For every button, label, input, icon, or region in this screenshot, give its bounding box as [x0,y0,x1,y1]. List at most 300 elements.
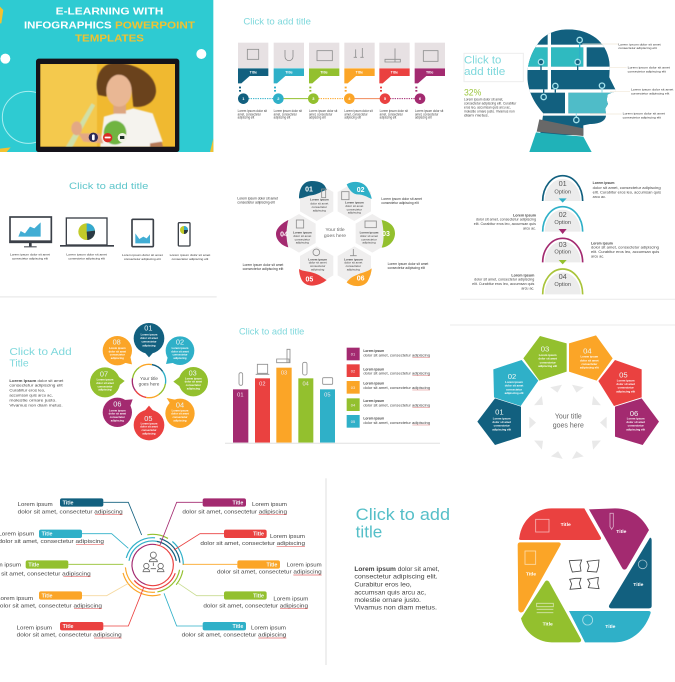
bubble centre title: Your title [140,376,158,381]
title pills: Title [42,532,53,538]
head labels: consectetur adipiscing elit [631,92,670,96]
numbered blobs: 03 [382,231,390,238]
hexagon captions: adipiscing [311,267,325,271]
timeline track: 5 [384,96,387,101]
title pills: Title [42,593,53,599]
numbered blobs [276,181,395,286]
head labels: consectetur adipiscing elit [618,46,657,50]
bubbles: Lorem ipsum [141,421,158,425]
bubbles: 05 [144,414,152,423]
timeline captions: Lorem ipsum dolor sit [274,109,302,113]
option captions left: arcu ac. [523,227,536,231]
panel: stacked options [460,176,675,300]
hexagon captions: dolor sit amet [345,204,363,208]
cover title: POWERPOINT [115,21,196,32]
hexagon captions: Lorem ipsum [345,201,364,205]
bubbles: dolor sit amet [109,412,126,416]
bubble centre title [139,376,160,386]
pentagons: Lorem ipsum [539,353,557,357]
pentagons: Lorem ipsum [627,416,645,420]
title pills: Title [232,624,243,630]
bubbles: 02 [176,338,184,347]
timeline captions: adipiscing elit [344,116,361,120]
hexagon captions: dolor sit amet [309,261,327,265]
bubbles: consectetur [110,353,125,357]
radial captions right: dolor sit amet, consectetur adipiscing [200,541,305,547]
radial captions right: Lorem ipsum [270,534,305,540]
hexagon icons [296,189,376,256]
bubble body text: Vivamus non diam metus. [9,403,63,407]
hexagon captions: dolor sit amet [360,234,378,238]
devices captions: consectetur adipiscing elit [124,257,161,261]
bubbles: Lorem ipsum [172,346,189,350]
hexagon captions: Lorem ipsum [308,257,327,261]
hexagon captions: dolor sit amet [344,261,362,265]
panel: e-learning cover [0,0,213,152]
bubble body text: molestie ornare justo. [9,398,57,402]
panel: speech bubble cycle [9,323,208,440]
panel: head silhouette [464,27,674,152]
bubbles: consectetur [110,415,125,419]
radial captions right: Lorem ipsum [287,563,322,569]
pentagons: Lorem ipsum [505,380,523,384]
cover title: E-LEARNING WITH [56,7,163,18]
option captions left: Lorem ipsum [511,273,535,277]
timeline banners: Title [250,71,257,75]
radial captions right: dolor sit amet, consectetur adipiscing [182,633,286,639]
grey hexagons [282,182,389,285]
pentagons: adipiscing elit [505,391,523,395]
head labels: Lorem ipsum dolor sit amet [618,42,661,46]
pentagons [477,335,659,445]
option captions [591,181,661,259]
panel: bar chart [225,326,440,444]
hexagon side labels: consectetur adipiscing elit [237,200,275,204]
legend: 02 [351,368,356,373]
devices title: Click to add title [69,181,148,191]
bubbles: dolor sit amet [171,412,189,416]
hexagon captions: adipiscing [347,267,360,271]
bubbles: adipiscing [142,343,156,347]
timeline captions: amet, consectetur [309,112,333,116]
bubble title [9,347,72,370]
icon: desktop monitor [9,217,52,247]
hexagon captions: dolor sit amet [293,234,311,238]
radial captions right: dolor sit amet, consectetur adipiscing [182,509,287,515]
legend: dolor sit amet, consectetur adipiscing [363,372,430,376]
radial captions left: Lorem ipsum [18,502,53,508]
bubbles [90,323,208,440]
timeline captions: Lorem ipsum dolor sit [344,109,373,113]
option labels [554,179,571,288]
head labels: Lorem ipsum dolor sit amet [628,66,670,70]
title pills: Title [63,624,74,630]
timeline banners: Title [285,71,293,75]
laptop with video call photo [36,59,179,152]
icon: laptop [60,218,114,247]
bubbles: Lorem ipsum [109,408,126,412]
bubbles: adipiscing [98,388,112,392]
timeline captions: amet, consectetur [415,112,439,116]
pentagons: consectetur [506,387,523,391]
video call buttons [89,133,127,142]
head with bricks [527,29,616,135]
shutter blades [518,508,652,642]
bubbles: adipiscing [142,431,156,435]
timeline captions: amet, consectetur [274,112,298,116]
pentagons: 02 [508,372,516,381]
devices captions [10,252,211,261]
bubbles: 07 [100,370,108,379]
bubbles: adipiscing [187,386,200,390]
pentagons: 03 [541,345,549,354]
devices captions: Lorem ipsum dolor sit amet [10,252,50,256]
option captions left: elit. Curabitur eros leo, accumsan quis [474,222,536,226]
pentagons: 06 [630,409,638,418]
numbered blobs: 04 [280,231,288,238]
timeline track [238,87,425,104]
option labels: Option [554,250,571,256]
pentagons: dolor sit amet [538,357,557,361]
bars: 02 [259,381,265,387]
shutter body text: molestie ornare justo. [354,598,421,604]
bubble title: Click to Add [9,347,72,358]
legend: dolor sit amet, consectetur adipiscing [363,421,430,425]
shutter body text: Lorem ipsum dolor sit amet, [354,567,440,573]
option labels: Option [554,220,571,226]
hexagon centre title: Your title [325,227,345,233]
legend: Lorem ipsum [363,382,384,386]
pentagon centre title [553,413,584,430]
devices captions: Lorem ipsum dolor sit amet [122,253,163,257]
timeline track: 1 [242,96,245,101]
32 percent stat: consectetur adipiscing elit. Curabitur [464,101,517,105]
bar icons [239,349,333,385]
legend: Lorem ipsum [363,417,384,421]
option labels: 02 [559,210,567,219]
timeline track: 6 [419,96,422,101]
panel: radial people map [0,498,322,639]
32 percent stat: 32% [464,88,481,98]
option arcs [543,176,583,294]
hexagon captions: consectetur [347,207,362,211]
timeline captions: Lorem ipsum dolor sit [380,109,408,113]
numbered blobs: 06 [357,276,365,283]
hexagon captions: Lorem ipsum [293,231,312,235]
radial captions right: dolor sit amet, consectetur adipiscing [203,603,308,609]
panel: hexagon cycle [237,181,428,286]
icon: phone [178,223,190,246]
hexagon centre title [324,227,346,239]
bubble body text: accumsan quis arcu ac, [9,393,53,397]
pentagons: adipiscing elit [626,427,645,431]
hexagon captions: consectetur [310,264,325,268]
click to add title box: add title [464,66,505,78]
radial captions left: dolor sit amet, consectetur adipiscing [0,539,104,545]
bubbles: dolor sit amet [140,425,158,429]
devices captions: Lorem ipsum dolor sit amet [170,253,211,257]
bars: 01 [237,393,243,399]
bubbles: adipiscing [111,418,124,422]
option labels: Option [554,282,571,288]
option labels: Option [554,189,571,195]
timeline track: 4 [348,96,351,101]
timeline captions: amet, consectetur [380,112,404,116]
shutter blades: Title [543,622,553,628]
legend [347,348,430,428]
hexagon captions: adipiscing [296,241,309,245]
devices captions: consectetur adipiscing elit [172,257,208,261]
bubbles: dolor sit amet [171,349,189,353]
timeline cards [238,43,445,68]
legend: 05 [351,419,356,424]
bubbles: Lorem ipsum [97,378,114,382]
shutter blades: Title [633,582,644,588]
shutter title: Click to add [356,506,450,524]
timeline track: 3 [312,96,315,101]
pentagons: Lorem ipsum [617,378,635,382]
pentagons: adipiscing elit [492,427,511,431]
timeline captions: adipiscing elit [238,116,254,120]
radial captions left: dolor sit amet, consectetur adipiscing [17,633,122,639]
hexagon captions [293,198,379,271]
hexagon captions: Lorem ipsum [360,231,379,235]
timeline track: 2 [277,96,280,101]
bubbles: dolor sit amet [185,380,202,384]
bubbles: 06 [113,400,121,409]
bars: 03 [281,370,287,376]
bubbles: consectetur [97,384,113,388]
hexagon side labels: Lorem ipsum dolor sit amet [388,262,428,266]
pentagons: dolor sit amet [580,358,599,362]
option captions left [472,213,537,291]
cover title: INFOGRAPHICS [24,21,112,32]
shutter body text: Vivamus non diam metus. [354,606,437,612]
hexagon side labels: consectetur adipiscing elit [381,201,419,205]
pentagons: 01 [495,407,504,416]
hexagon captions: adipiscing [362,241,376,245]
hexagon centre title: goes here [324,233,346,239]
bubbles: consectetur [172,415,188,419]
bubble body text [9,379,63,407]
radial captions right: Lorem ipsum [273,596,309,602]
pentagons: dolor sit amet [626,420,645,424]
pentagons: consectetur [581,362,598,366]
option captions: Lorem ipsum [593,181,615,185]
hexagon captions: consectetur [346,264,361,268]
32 percent stat: molestie ornare justo. Vivamus non [464,109,515,113]
radial captions right: Lorem ipsum [252,502,287,508]
bubbles: dolor sit amet [96,381,114,385]
shoulders and collar [529,119,592,152]
hexagon captions: consectetur [312,205,327,209]
numbered blobs: 02 [357,187,365,194]
hexagon captions: consectetur [361,237,377,241]
icon: centre arrows [569,560,599,589]
title pills: Title [232,500,243,506]
bubbles: consectetur [186,383,201,387]
hexagon captions: adipiscing [313,209,326,213]
pentagons: Lorem ipsum [580,355,599,359]
legend: dolor sit amet, consectetur adipiscing [363,353,430,357]
click to add title box [464,53,523,82]
bubbles: Lorem ipsum [172,408,189,412]
bubble body text: Curabitur eros leo, [9,389,45,393]
pentagons: adipiscing elit [538,364,557,368]
title pills: Title [266,562,277,568]
bubbles: Lorem ipsum [109,346,126,350]
bubble centre title: goes here [139,381,160,386]
option captions: Lorem ipsum [591,241,613,245]
option captions left: arcu ac. [521,287,534,291]
legend: 01 [351,352,356,357]
radial captions right: dolor sit amet, consectetur adipiscing [217,570,322,576]
hexagon captions: Lorem ipsum [310,198,329,202]
pentagon centre title: goes here [553,423,584,430]
32 percent stat [464,88,517,117]
bubbles: dolor sit amet [140,336,158,340]
timeline captions: adipiscing elit [274,116,290,120]
timeline captions: adipiscing elit [380,116,396,120]
bubble centre ring [126,358,172,404]
devices captions: Lorem ipsum dolor sit amet [66,252,107,256]
option captions left: Lorem ipsum [513,213,537,217]
numbered blobs: 05 [305,276,313,283]
timeline captions [238,109,443,120]
pentagons: consectetur [628,424,645,428]
bubbles: Lorem ipsum [141,332,158,336]
timeline banners: Title [356,71,363,75]
option captions left: dolor sit amet, consectetur adipiscing [474,278,534,282]
bubbles: adipiscing [111,356,124,360]
hexagon side labels: Lorem ipsum dolor sit amet [243,263,283,267]
bubble title: Title [9,359,29,370]
head labels [618,42,674,119]
legend: 04 [351,402,356,407]
hexagon captions: dolor sit amet [310,201,328,205]
cover title [24,7,196,44]
option captions: elit. Curabitur eros leo, accumsan quis [591,250,660,254]
legend: Lorem ipsum [363,368,384,372]
pentagons: consectetur [540,360,557,364]
hexagon side labels: Lorem ipsum dolor sit amet [237,196,278,200]
title pills: Title [28,562,39,568]
timeline banners: Title [320,71,328,75]
hexagon captions: consectetur [295,237,310,241]
option captions left: dolor sit amet, consectetur adipiscing [476,218,536,222]
icon: people [143,552,164,572]
bubbles: dolor sit amet [109,349,126,353]
pentagon centre title: Your title [555,413,582,420]
panel: six step timeline [238,17,445,120]
option labels: 03 [559,240,567,249]
centre grey arrows [529,385,607,459]
32 percent stat: diam metus. [464,113,489,117]
shutter blades: Title [526,571,536,577]
head connector nodes [538,37,630,123]
panel: devices [0,181,217,298]
option labels: 04 [559,272,567,281]
radial captions left: Lorem ipsum [17,625,52,631]
timeline captions: amet, consectetur [238,112,262,116]
head labels: consectetur adipiscing elit [628,69,666,73]
shutter body text: accumsan quis arcu ac, [354,590,426,596]
head labels: Lorem ipsum dolor sit amet [623,111,665,115]
legend: Lorem ipsum [363,349,384,353]
pentagons: adipiscing elit [580,366,599,370]
numbered blobs: 01 [305,187,313,194]
pentagons: 05 [619,370,628,379]
devices captions: consectetur adipiscing elit [12,256,48,260]
radial captions right [182,502,322,639]
hexagon captions: adipiscing [348,211,361,215]
bubbles: consectetur [141,340,157,344]
timeline captions: amet, consectetur [344,112,368,116]
option captions: arcu ac. [591,255,604,259]
option captions: dolor sit amet, consectetur adipiscing [591,246,659,250]
hexagon side labels: consectetur adipiscing elit [243,267,283,271]
radial rings [109,522,196,608]
timeline captions: Lorem ipsum dolor sit [238,109,267,113]
timeline captions: Lorem ipsum dolor sit [415,109,443,113]
shutter blades: Title [561,522,571,528]
32 percent stat: Lorem ipsum dolor sit amet, [464,97,503,101]
bubbles: 08 [113,337,121,346]
radial captions left: dolor sit amet, consectetur adipiscing [18,509,123,515]
bubbles: 04 [176,401,184,410]
hexagon side labels: consectetur adipiscing elit [388,266,425,270]
shutter body text [354,567,440,612]
bars: 05 [324,393,330,399]
bubbles: adipiscing [173,356,187,360]
legend: Lorem ipsum [363,399,384,403]
timeline banners: Title [426,71,433,75]
click to add title box: Click to [464,54,501,66]
timeline captions: Lorem ipsum dolor sit [309,109,337,113]
legend: dolor sit amet, consectetur adipiscing [363,403,430,407]
pentagons: consectetur [618,386,635,390]
legend: dolor sit amet, consectetur adipiscing [363,386,430,390]
cover title: TEMPLATES [75,33,144,44]
option labels: 01 [559,179,567,188]
panel: shutter diagram [325,478,652,665]
timeline captions: adipiscing elit [415,116,432,120]
bar chart title: Click to add title [239,326,304,336]
pentagons: dolor sit amet [616,382,635,386]
option captions: arcu ac. [593,195,606,199]
shutter title: title [356,524,382,542]
timeline banners: Title [391,71,398,75]
shutter blades: Title [616,529,627,535]
head labels: Lorem ipsum dolor sit amet [631,87,674,91]
timeline captions: adipiscing elit [309,116,326,120]
radial captions left [0,502,123,639]
bubbles: Lorem ipsum [185,376,202,380]
pentagons: 04 [583,346,592,355]
pentagons: adipiscing elit [616,389,635,393]
timeline banners [238,68,445,83]
pentagons: consectetur [494,424,511,428]
shutter body text: consectetur adipiscing elit. [354,575,438,581]
head labels: consectetur adipiscing elit [623,115,661,119]
bubble body text: consectetur adipiscing elit [9,384,63,388]
panel: pentagon fan [450,324,675,459]
title pills: Title [253,593,264,599]
radial captions right: Lorem ipsum [251,625,286,631]
icon: tablet [132,219,153,247]
bubble body text: Lorem Ipsum dolor sit amet [9,379,63,383]
connectors [68,502,237,626]
